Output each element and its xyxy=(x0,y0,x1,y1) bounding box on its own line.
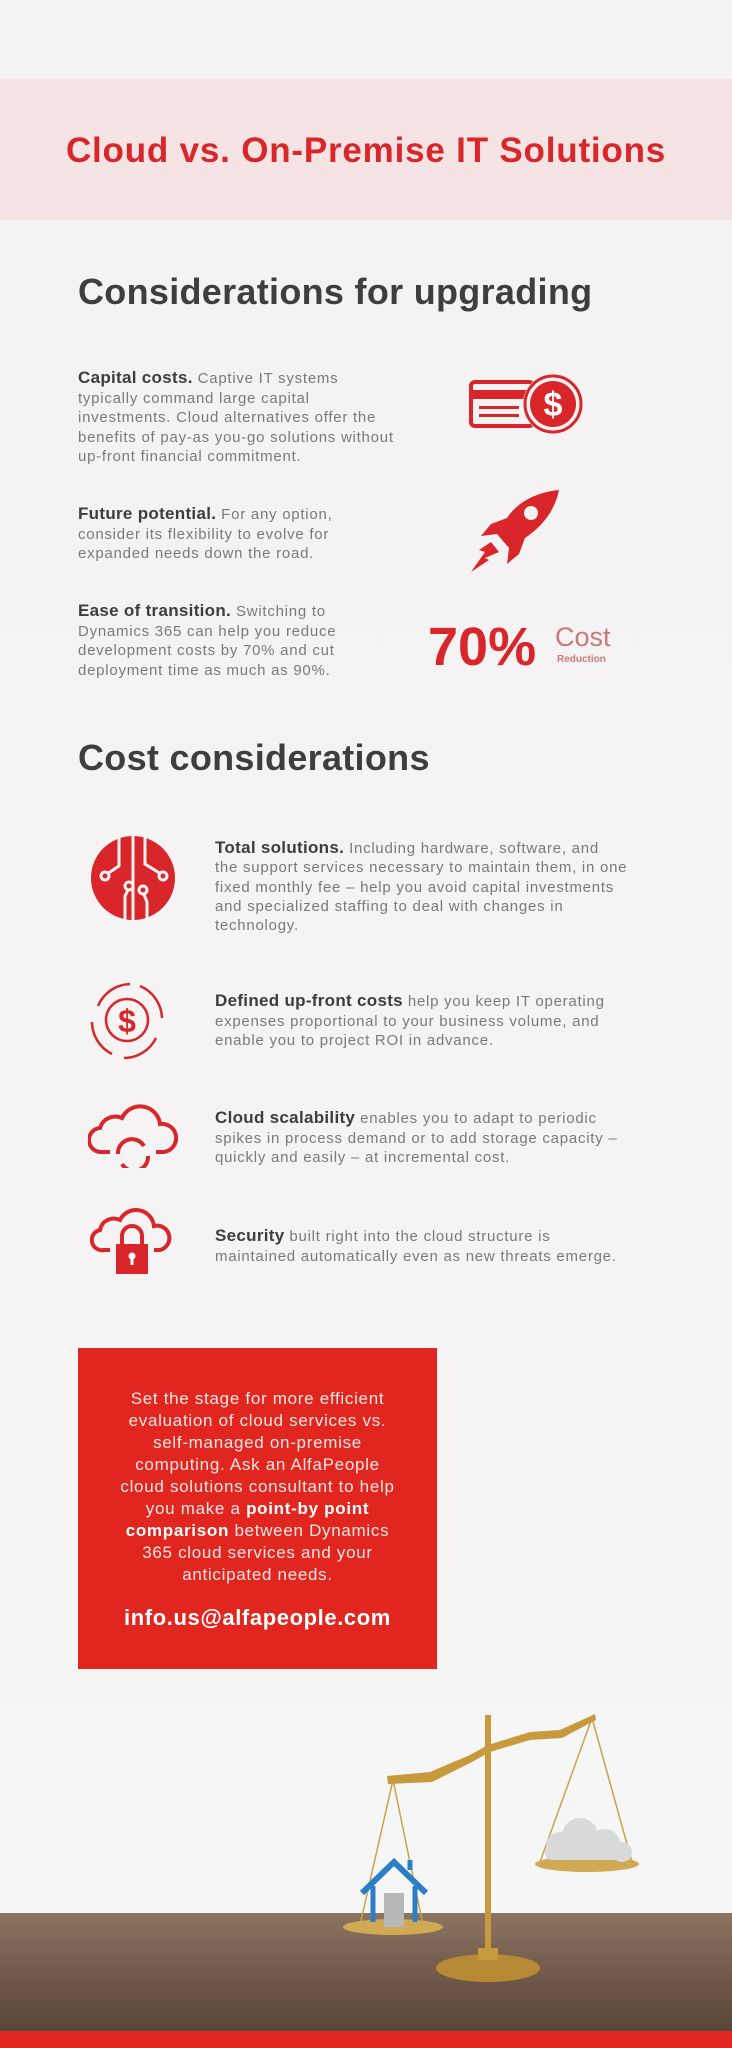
text: ease of transition: deployment time as much as 90%. xyxy=(78,662,331,678)
callout text: comparison between Dynamics xyxy=(126,1521,389,1540)
callout text: 365 cloud services and your xyxy=(142,1543,373,1562)
icon: dollar cycle: $ xyxy=(118,1003,136,1039)
callout text: self-managed on-premise xyxy=(153,1433,362,1452)
text: ease of transition: Ease of transition. Switching to xyxy=(78,601,326,620)
text: capital costs: typically command large capital xyxy=(78,390,310,406)
text: defined up-front costs: enable you to project ROI in advance. xyxy=(215,1032,494,1049)
text: total solutions: and specialized staffing to deal with changes in xyxy=(215,898,563,915)
stat: 70% cost reduction: Reduction xyxy=(557,654,606,665)
text: future potential: consider its flexibility to evolve for xyxy=(78,526,329,542)
text: defined up-front costs: expenses proportional to your business volume, and xyxy=(215,1012,599,1030)
text: future potential: Future potential. For any option, xyxy=(78,504,332,523)
icon: rocket xyxy=(471,490,559,572)
text: total solutions: Total solutions. Including hardware, software, and xyxy=(215,838,599,857)
callout box xyxy=(78,1348,437,1669)
callout text xyxy=(120,1389,395,1584)
text: defined up-front costs xyxy=(215,991,605,1049)
text: future potential: expanded needs down the road. xyxy=(78,545,314,562)
stat: 70% cost reduction: Cost xyxy=(555,622,611,652)
illustration: balance scale xyxy=(343,1714,639,1982)
icon: cloud sync xyxy=(88,1104,178,1168)
text: total solutions: fixed monthly fee – help you avoid capital investments xyxy=(215,879,614,896)
text: defined up-front costs: Defined up-front costs help you keep IT operating xyxy=(215,991,605,1010)
callout text: evaluation of cloud services vs. xyxy=(129,1411,386,1430)
text: total solutions: the support services necessary to maintain them, in one xyxy=(215,859,627,876)
text: total solutions: technology. xyxy=(215,917,299,934)
callout text: you make a point-by point xyxy=(146,1499,369,1518)
text: security: Security built right into the cloud structure is xyxy=(215,1226,550,1245)
icon: dollar cycle xyxy=(90,982,164,1060)
text: ease of transition xyxy=(78,601,336,678)
icon: circuit xyxy=(91,836,175,920)
text: capital costs xyxy=(78,368,394,465)
icon: card and dollar xyxy=(469,374,582,434)
text: ease of transition: Dynamics 365 can help you reduce xyxy=(78,622,336,640)
stat: 70% cost reduction: 70% xyxy=(428,617,536,677)
bottom red bar xyxy=(0,2031,732,2048)
text: capital costs: Capital costs. Captive IT systems xyxy=(78,368,338,387)
text: capital costs: investments. Cloud alternatives offer the xyxy=(78,409,376,426)
callout text: Set the stage for more efficient xyxy=(131,1389,384,1408)
text: future potential xyxy=(78,504,332,562)
text: cloud scalability: quickly and easily – at incremental cost. xyxy=(215,1149,510,1166)
title: Cloud vs. On-Premise IT Solutions xyxy=(66,131,666,170)
text: security xyxy=(215,1226,617,1264)
text: cloud scalability xyxy=(215,1108,617,1166)
text: capital costs: benefits of pay-as you-go solutions without xyxy=(78,428,394,446)
callout text: cloud solutions consultant to help xyxy=(120,1477,395,1496)
callout text: anticipated needs. xyxy=(182,1565,333,1584)
callout text: computing. Ask an AlfaPeople xyxy=(135,1455,380,1474)
stat: 70% cost reduction xyxy=(428,617,611,677)
email: info.us@alfapeople.com xyxy=(124,1605,391,1630)
heading: considerations for upgrading: Considerations for upgrading xyxy=(78,271,592,312)
text: ease of transition: development costs by 70% and cut xyxy=(78,642,335,659)
icon: card and dollar: $ xyxy=(544,386,563,424)
heading: cost considerations: Cost considerations xyxy=(78,737,430,778)
text: cloud scalability: Cloud scalability enables you to adapt to periodic xyxy=(215,1108,597,1127)
icon: cloud lock xyxy=(90,1208,172,1274)
text: security: maintained automatically even as new threats emerge. xyxy=(215,1248,617,1264)
text: cloud scalability: spikes in process demand or to add storage capacity – xyxy=(215,1130,617,1146)
title band xyxy=(0,79,732,220)
floor xyxy=(0,1913,732,2031)
text: total solutions xyxy=(215,838,627,934)
text: capital costs: up-front financial commitment. xyxy=(78,448,301,465)
